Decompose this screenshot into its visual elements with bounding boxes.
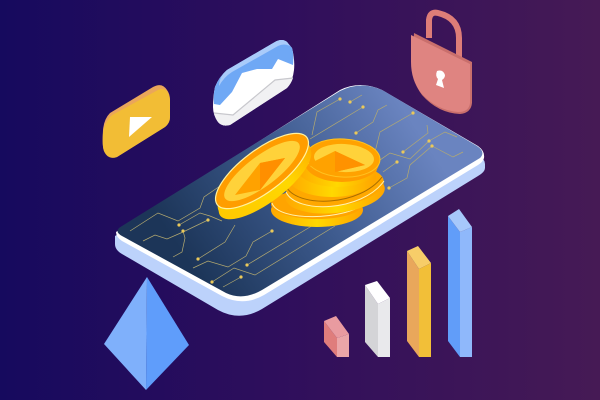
- bar 2: [365, 281, 390, 357]
- padlock body: [411, 35, 470, 112]
- phone base: [115, 95, 485, 316]
- bar 1: [324, 316, 349, 357]
- phone: [115, 85, 485, 316]
- bottom coin: [271, 189, 363, 227]
- phone screen: [118, 86, 482, 296]
- padlock side: [412, 33, 472, 114]
- play triangle: [129, 117, 152, 137]
- keyhole: [436, 70, 445, 88]
- padlock icon: [411, 13, 472, 114]
- coin emblem: [235, 158, 285, 195]
- circuit traces: [130, 95, 463, 287]
- bar 3: [407, 246, 431, 357]
- coin stack: [205, 121, 387, 232]
- mountain chart card icon: [213, 40, 294, 126]
- circuit nodes: [177, 97, 434, 284]
- play card icon: [103, 85, 170, 158]
- leaning coin: [205, 121, 322, 232]
- padlock shackle: [429, 13, 459, 60]
- phone white rim: [116, 85, 484, 301]
- coin emblem: [307, 151, 365, 172]
- crystal pyramid: [104, 277, 189, 390]
- top coin: [288, 137, 381, 197]
- bar chart: [324, 209, 472, 357]
- bar 4: [448, 209, 472, 357]
- middle coin: [283, 161, 387, 218]
